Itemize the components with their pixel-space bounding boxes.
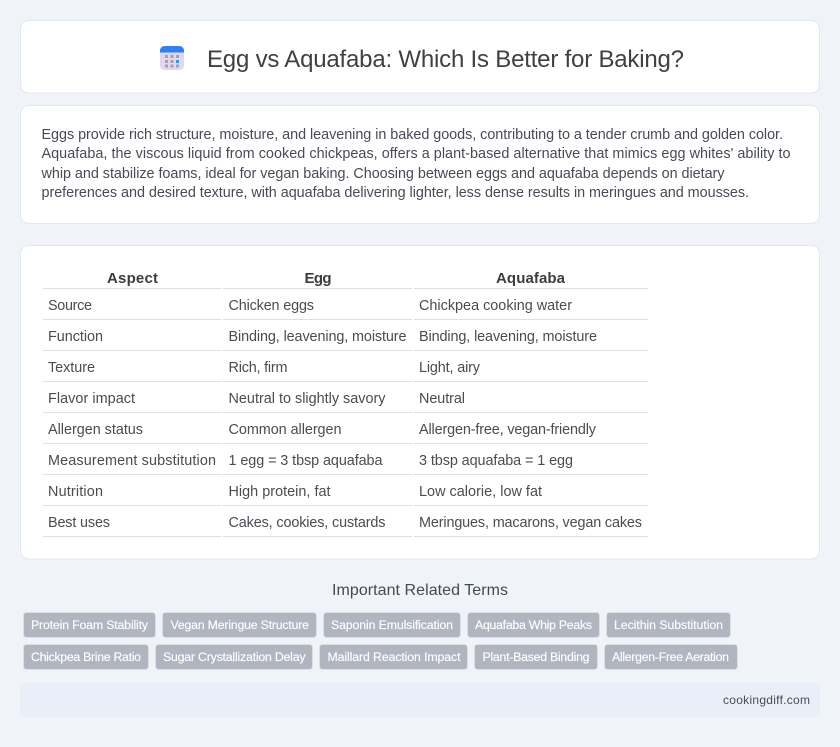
row: flavor impact: Neutral to slightly savory xyxy=(228,391,386,407)
panel: intro paragraph xyxy=(20,106,820,224)
row: allergen status: Allergen status xyxy=(48,422,143,438)
tag xyxy=(468,612,600,638)
row: flavor impact: Flavor impact xyxy=(48,391,135,407)
tag: Protein Foam Stability xyxy=(31,618,149,632)
row: allergen status: Allergen-free, vegan-friendly xyxy=(419,422,597,438)
tag xyxy=(320,644,468,670)
row: best uses: Meringues, macarons, vegan cakes xyxy=(419,515,642,531)
row: nutrition: Nutrition xyxy=(48,484,103,500)
tag: Lecithin Substitution xyxy=(614,618,723,632)
footer bar xyxy=(20,683,820,717)
row: measurement substitution: Measurement substitution xyxy=(48,453,216,469)
icon: abacus calendar xyxy=(160,46,184,70)
tag xyxy=(474,644,598,670)
row: measurement substitution: 1 egg = 3 tbsp aquafaba xyxy=(228,453,382,469)
row: best uses: Best uses xyxy=(48,515,110,531)
row: source: Chickpea cooking water xyxy=(419,298,572,314)
tag xyxy=(156,644,312,670)
tag: Maillard Reaction Impact xyxy=(328,650,461,664)
row: function xyxy=(48,329,597,345)
panel: intro paragraph: preferences and desired texture, with aquafaba delivering lighter, less dense results in meringues and mousses. xyxy=(42,185,749,201)
tag xyxy=(162,612,316,638)
table header row xyxy=(107,270,566,287)
row: texture: Rich, firm xyxy=(228,360,288,376)
row: texture xyxy=(48,360,481,376)
related term tags xyxy=(24,612,738,670)
tag: Sugar Crystallization Delay xyxy=(163,650,306,664)
row lines xyxy=(43,288,648,536)
row: function: Binding, leavening, moisture xyxy=(228,329,406,345)
row: measurement substitution xyxy=(48,453,573,469)
header card xyxy=(20,20,820,93)
row: nutrition: High protein, fat xyxy=(228,484,330,500)
row: flavor impact: Neutral xyxy=(419,391,465,407)
tag: Aquafaba Whip Peaks xyxy=(475,618,592,632)
table header row: Egg xyxy=(304,270,332,287)
table header row: Aspect xyxy=(107,270,158,287)
row: texture: Light, airy xyxy=(419,360,481,376)
row: best uses: Cakes, cookies, custards xyxy=(228,515,386,531)
row: nutrition xyxy=(48,484,542,500)
tag: Plant-Based Binding xyxy=(482,650,590,664)
tag xyxy=(24,612,156,638)
tag: Chickpea Brine Ratio xyxy=(31,650,141,664)
row: flavor impact xyxy=(48,391,465,407)
panel: comparison table xyxy=(20,246,820,559)
row: source: Source xyxy=(48,298,92,314)
row: allergen status xyxy=(48,422,597,438)
row: source: Chicken eggs xyxy=(228,298,314,314)
tag xyxy=(24,644,148,670)
row: function: Function xyxy=(48,329,103,345)
row: best uses xyxy=(48,515,642,531)
tag xyxy=(606,612,730,638)
row: texture: Texture xyxy=(48,360,95,376)
tag xyxy=(324,612,460,638)
footer bar: cookingdiff.com xyxy=(723,693,810,707)
row: function: Binding, leavening, moisture xyxy=(419,329,597,345)
row: measurement substitution: 3 tbsp aquafaba = 1 egg xyxy=(419,453,573,469)
title: Egg vs Aquafaba: Which Is Better for Baking? xyxy=(207,46,684,73)
row: source xyxy=(48,298,572,314)
tag: Saponin Emulsification xyxy=(331,618,453,632)
panel: intro paragraph: Eggs provide rich structure, moisture, and leavening in baked goods, contributing to a tender crumb and golden color. xyxy=(42,127,783,143)
row: nutrition: Low calorie, low fat xyxy=(419,484,542,500)
heading: related terms: Important Related Terms xyxy=(332,582,508,599)
tag: Vegan Meringue Structure xyxy=(170,618,309,632)
row: allergen status: Common allergen xyxy=(228,422,342,438)
tag: Allergen-Free Aeration xyxy=(612,650,729,664)
tag xyxy=(604,644,738,670)
panel: intro paragraph: Aquafaba, the viscous liquid from cooked chickpeas, offers a plant-based alternative that mimics egg whites' ability to xyxy=(42,146,790,162)
table header row: Aquafaba xyxy=(496,270,566,287)
panel: intro paragraph: whip and stabilize foams, ideal for vegan baking. Choosing between eggs and aquafaba depends on dietary xyxy=(40,166,725,182)
